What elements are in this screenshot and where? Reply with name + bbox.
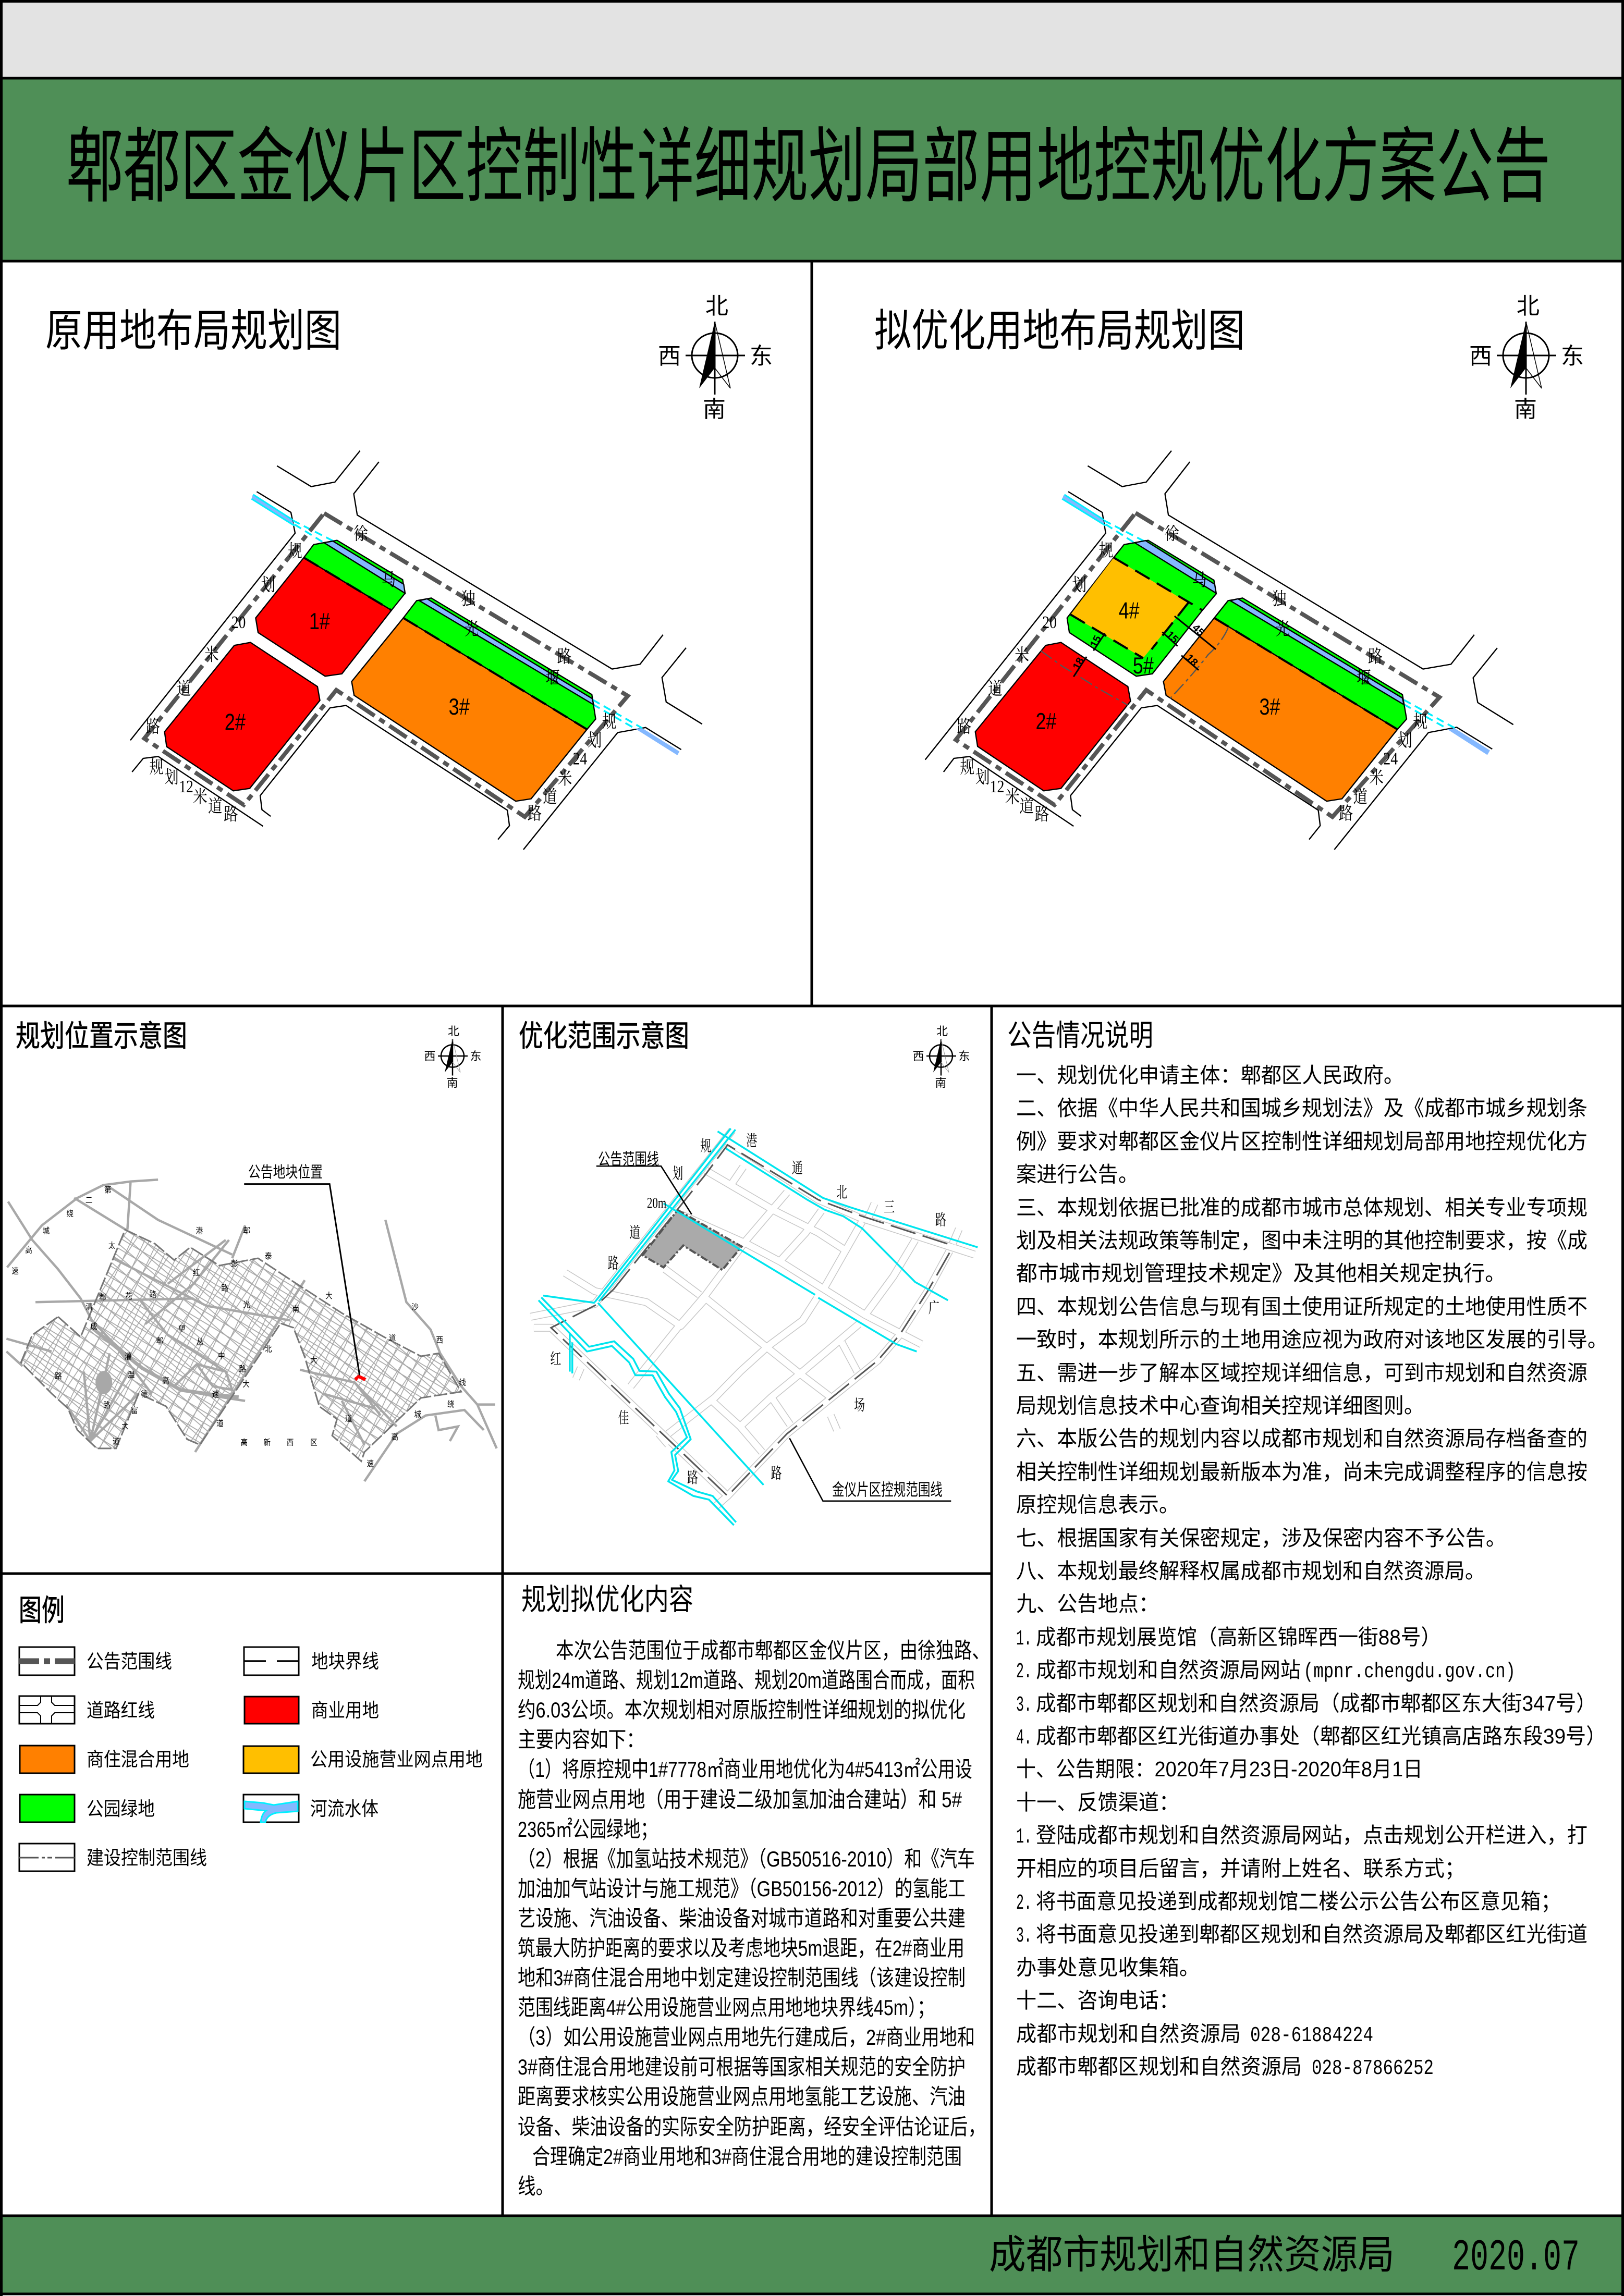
map road labels: 望	[178, 1324, 186, 1334]
road labels: 20	[1042, 612, 1057, 632]
text block: optimization content: （1）将原控规中1#7778㎡商业用地优化为4#5413㎡公用设	[518, 1757, 972, 1782]
map road labels: 路	[103, 1401, 111, 1410]
text block: notice description: 八、本规划最终解释权属成都市规划和自然资源局。	[1016, 1559, 1485, 1583]
map road labels: 郫	[156, 1336, 163, 1346]
scope road labels: 港	[746, 1132, 757, 1149]
plot dash boundaries	[1070, 558, 1397, 729]
dimension values: 45	[1190, 622, 1207, 639]
map road labels: 大	[121, 1421, 129, 1431]
text block: notice description: 十二、咨询电话：	[1016, 1988, 1179, 2012]
road labels	[957, 524, 1427, 824]
legend item: water: 河流水体	[310, 1798, 378, 1820]
icon: compass right: 北	[1517, 293, 1540, 319]
range boundary	[551, 1145, 953, 1496]
text block: notice description	[1016, 1063, 1608, 2081]
road labels: 划	[164, 768, 179, 787]
text block: notice description: 成都市规划展览馆（高新区锦晖西一街88号）	[1036, 1625, 1441, 1649]
text block: notice description: 九、公告地点：	[1016, 1592, 1159, 1616]
text block: notice description: 十、公告期限：2020年7月23日-2020年8月1日	[1016, 1757, 1423, 1781]
road labels: 路	[557, 647, 571, 667]
text block: notice description: 五、需进一步了解本区域控规详细信息，可到市规划和自然资源	[1016, 1361, 1588, 1385]
notice area	[643, 1210, 742, 1270]
map road labels: 温	[128, 1370, 135, 1380]
heading: scope: 优化范围示意图	[519, 1020, 689, 1053]
dimension values: 18	[1070, 656, 1086, 672]
text block: optimization content: 地和3#商住混合用地中划定建设控制范围线（该建设控制	[518, 1966, 966, 1990]
road labels	[146, 524, 616, 824]
road labels: 24	[573, 749, 587, 768]
legend item: plot boundary	[244, 1647, 379, 1675]
text block: notice description: 十一、反馈渠道：	[1016, 1790, 1179, 1814]
text block: notice description: 局规划信息技术中心查询相关控规详细图则。	[1016, 1394, 1424, 1418]
text block: optimization content: 范围线距离4#公用设施营业网点用地地块界线45m）；	[518, 1995, 935, 2020]
map road labels: 区	[310, 1439, 318, 1447]
legend item: utility: 公用设施营业网点用地	[310, 1749, 483, 1770]
text block: notice description: 原控规信息表示。	[1016, 1493, 1179, 1517]
block 2 commercial	[165, 643, 320, 791]
icon: compass left: 北	[705, 293, 728, 319]
icon: compass left: 西	[658, 343, 681, 369]
text block: notice description: 2.	[1016, 1660, 1032, 1684]
road labels: 划	[1072, 575, 1086, 595]
map road labels: 大	[310, 1356, 318, 1365]
text block: notice description: 1.	[1016, 1627, 1032, 1651]
plot dash boundaries	[304, 558, 587, 729]
scope road labels: 路	[771, 1465, 782, 1482]
map road labels: 道	[216, 1419, 224, 1428]
map road labels: 港	[196, 1226, 203, 1236]
map road labels: 西	[287, 1439, 294, 1447]
text block: notice description: 一、规划优化申请主体：郫都区人民政府。	[1016, 1063, 1404, 1087]
plot numbers: 2#	[1035, 708, 1057, 734]
panel: legend	[19, 1594, 483, 1871]
map road labels: 绕	[447, 1399, 455, 1409]
dimension values: 15	[1088, 633, 1104, 649]
road labels: 道	[177, 679, 191, 699]
map road labels: 郫	[243, 1226, 250, 1236]
text block: notice description: 七、根据国家有关保密规定，涉及保密内容不予公告。	[1016, 1526, 1506, 1550]
text block: notice description: 划及相关法规政策等制定，图中未注明的其他控制要求，按《成	[1016, 1229, 1588, 1253]
text block: optimization content: 加油加气站设计与施工规范》（GB50156-2012）的氢能工	[518, 1876, 966, 1901]
heading: location: 规划位置示意图	[16, 1020, 187, 1053]
map road labels: 沙	[411, 1303, 419, 1312]
road labels: 规	[1099, 541, 1113, 560]
block 3 water strip	[419, 599, 594, 705]
road labels: 道	[1019, 796, 1034, 816]
icon: compass scope: 东	[958, 1050, 970, 1063]
text block: notice description: 2.	[1016, 1892, 1032, 1916]
icon: compass location	[424, 1025, 482, 1089]
icon: compass scope: 西	[912, 1050, 924, 1063]
map road labels: 路	[221, 1284, 228, 1293]
text block: optimization content: 设备、柴油设备的实际安全防护距离，经安全评估论证后，	[518, 2115, 986, 2139]
district boundary	[21, 1230, 461, 1461]
map road labels: 高	[162, 1376, 169, 1385]
legend item: control line: 建设控制范围线	[87, 1847, 207, 1869]
legend item: notice boundary: 公告范围线	[87, 1651, 172, 1672]
legend item: mixed use	[20, 1746, 189, 1773]
road labels: 光	[465, 619, 479, 639]
plot numbers: 3#	[1259, 693, 1280, 720]
panel: original land use map	[45, 293, 773, 850]
scope road labels: 路	[687, 1469, 698, 1487]
map road labels: 二	[86, 1196, 93, 1205]
text block: notice description: 1.	[1016, 1825, 1032, 1849]
block 1 commercial	[255, 558, 392, 676]
notice boundary	[956, 513, 1439, 817]
plot numbers	[225, 608, 470, 735]
road labels: 独	[461, 590, 476, 609]
map: original land use	[130, 451, 702, 850]
road labels: 道	[988, 679, 1003, 699]
main roads	[6, 1180, 497, 1481]
map road labels: 路	[239, 1365, 246, 1374]
dimension values: 15	[1164, 629, 1181, 646]
road labels: 徐	[1165, 524, 1179, 544]
dimension values	[1070, 622, 1207, 672]
block 3 mixed use	[1164, 618, 1397, 801]
icon: compass left: 东	[750, 343, 773, 369]
block 1 water strip	[1135, 541, 1216, 593]
road labels: 规	[288, 542, 302, 561]
text block: notice description: 都市城市规划管理技术规定》及其他相关规定执行。	[1016, 1261, 1506, 1285]
map road labels: 红	[193, 1268, 200, 1278]
road labels: 路	[224, 805, 238, 824]
block 3 water strip	[1230, 599, 1404, 705]
road labels: 12	[179, 777, 193, 796]
map: scope	[531, 1128, 978, 1525]
map road labels: 西	[436, 1336, 443, 1345]
dense junction	[95, 1371, 112, 1394]
plot numbers: 2#	[225, 709, 246, 735]
map road labels: 新	[263, 1438, 271, 1447]
panel: optimization content	[518, 1583, 990, 2199]
scope road labels: 佳	[618, 1409, 629, 1427]
map road labels: 清	[86, 1302, 93, 1312]
plot numbers	[1035, 597, 1280, 734]
icon: compass scope: 北	[936, 1025, 948, 1038]
text block: optimization content: 主要内容如下：	[518, 1727, 644, 1752]
callout leaders	[596, 1166, 951, 1501]
top blank gray band	[0, 0, 1624, 79]
text block: notice description: 办事处意见收集箱。	[1016, 1956, 1200, 1980]
scope road labels: 红	[550, 1350, 561, 1368]
legend item: mixed use: 商住混合用地	[87, 1749, 189, 1770]
map road labels: 道	[113, 1437, 119, 1446]
notice boundary	[144, 513, 628, 817]
map road labels: 道	[389, 1333, 396, 1343]
icon: compass location: 北	[448, 1025, 459, 1038]
panel: location map	[6, 1021, 498, 1482]
notice plot marker	[354, 1374, 367, 1381]
map road labels: 光	[243, 1300, 250, 1309]
header band	[0, 78, 1624, 261]
map road labels: 北	[265, 1345, 272, 1354]
map road labels: 路	[55, 1371, 62, 1381]
text block: notice description: 一致时，本规划所示的土地用途应视为政府对该地区发展的引导。	[1016, 1328, 1608, 1352]
map road labels: 速	[212, 1390, 219, 1399]
road labels: 道	[208, 797, 222, 816]
legend item: notice boundary	[19, 1647, 172, 1675]
panel: optimization scope map	[519, 1020, 978, 1525]
text block: optimization content: 3#商住混合用地建设前可根据等国家相关规范的安全防护	[518, 2055, 966, 2079]
road labels: 规	[1413, 712, 1427, 732]
map road labels: 丛	[197, 1337, 203, 1347]
text block: notice description: 4.	[1016, 1726, 1032, 1750]
map: optimized land use	[925, 451, 1513, 850]
text block: optimization content: 约6.03公顷。本次规划相对原版控制性详细规划的拟优化	[518, 1698, 966, 1722]
river	[1062, 495, 1490, 755]
road interiors	[531, 1131, 974, 1507]
text block: optimization content: 本次公告范围位于成都市郫都区金仪片区，由徐独路、	[556, 1638, 990, 1663]
legend item: water	[243, 1795, 378, 1822]
scope road labels: 北	[836, 1184, 847, 1201]
road labels: 规	[149, 758, 164, 777]
map road labels: 高	[25, 1246, 32, 1255]
road red lines	[925, 451, 1513, 850]
footer issuer: 成都市规划和自然资源局	[989, 2233, 1395, 2277]
plot numbers: 4#	[1119, 597, 1140, 623]
map road labels: 高	[240, 1438, 248, 1447]
text block: notice description: 六、本版公告的规划内容以成都市规划和自然资源局存档备查的	[1016, 1427, 1588, 1451]
road labels: 规	[960, 757, 974, 777]
text block: notice description: 三、本规划依据已批准的成都市城市总体规划、相关专业专项规	[1016, 1196, 1588, 1220]
text block: optimization content: （2）根据《加氢站技术规范》（GB50516-2010）和《汽车	[518, 1847, 975, 1871]
text block: notice description: (mpnr.chengdu.gov.cn)	[1303, 1660, 1516, 1684]
icon: compass scope	[912, 1025, 970, 1089]
icon: compass right: 西	[1469, 343, 1492, 369]
text block: notice description: 例》要求对郫都区金仪片区控制性详细规划局部用地控规优化方	[1016, 1129, 1588, 1153]
icon: compass scope: 南	[935, 1076, 947, 1089]
street grid	[22, 1231, 459, 1458]
road labels: 米	[193, 788, 207, 807]
scope road labels: 划	[672, 1165, 683, 1182]
text block: notice description: 相关控制性详细规划最新版本为准，尚未完成调整程序的信息按	[1016, 1460, 1588, 1484]
road outlines	[531, 1131, 974, 1507]
map road labels: 城	[43, 1226, 50, 1236]
icon: compass location: 西	[424, 1050, 436, 1063]
map road labels: 成	[90, 1322, 97, 1331]
road labels: 路	[1368, 647, 1383, 667]
map road labels: 中	[218, 1351, 225, 1361]
road labels: 独	[1272, 589, 1287, 609]
road labels: 米	[558, 769, 572, 789]
map road labels: 花	[125, 1292, 132, 1301]
road labels: 路	[1034, 804, 1049, 824]
text block: notice description: 四、本规划公告信息与现有国土使用证所规定的土地使用性质不	[1016, 1295, 1588, 1319]
road labels: 划	[588, 731, 602, 751]
map road labels: 大	[325, 1291, 333, 1300]
road red lines	[130, 451, 702, 850]
construction control lines	[1041, 628, 1228, 705]
text block: optimization content: 线。	[518, 2174, 554, 2199]
map road labels: 绕	[66, 1209, 74, 1219]
road labels: 划	[975, 767, 990, 787]
road labels: 24	[1383, 748, 1398, 768]
callout: notice range: 公告范围线	[598, 1150, 659, 1169]
scope road labels: 20m	[647, 1194, 666, 1211]
panel: notice description	[1007, 1019, 1608, 2081]
map road labels: 大	[242, 1380, 250, 1389]
legend item: commercial	[245, 1697, 379, 1724]
plot numbers: 5#	[1133, 652, 1154, 679]
road labels: 米	[1015, 646, 1029, 666]
icon: compass right	[1469, 293, 1584, 422]
legend item: park	[20, 1795, 155, 1822]
river	[251, 495, 679, 755]
block 3 park strip	[404, 598, 596, 729]
text block: notice description: 3.	[1016, 1924, 1032, 1948]
map road labels: 速	[367, 1459, 374, 1468]
map road labels: 线	[459, 1378, 466, 1388]
road labels: 路	[146, 717, 160, 736]
heading: optimization content: 规划拟优化内容	[521, 1583, 693, 1616]
icon: compass left: 南	[703, 397, 726, 422]
plot numbers: 1#	[309, 608, 330, 634]
block 3 park strip	[1214, 598, 1407, 729]
scope road labels: 广	[929, 1299, 939, 1317]
road labels: 路	[1338, 804, 1353, 824]
block 1 park strip	[304, 541, 405, 610]
road labels: 米	[1005, 787, 1020, 807]
icon: compass location: 东	[470, 1050, 482, 1063]
text block: notice description: 成都市郫都区规划和自然资源局	[1016, 2055, 1302, 2079]
icon: compass location: 南	[446, 1076, 458, 1089]
road labels: 划	[1398, 730, 1412, 751]
text block: notice description: 3.	[1016, 1693, 1032, 1717]
map road labels: 南	[292, 1305, 299, 1314]
text block: notice description: 开相应的项目后留言，并请附上姓名、联系方式；	[1016, 1857, 1465, 1881]
text block: notice description: 成都市规划和自然资源局网站	[1036, 1658, 1301, 1682]
legend item: utility	[243, 1746, 483, 1773]
panel: optimized land use map	[874, 293, 1584, 850]
legend item: road red line: 道路红线	[87, 1700, 155, 1721]
plot numbers: 3#	[449, 694, 470, 720]
text block: optimization content: 2365㎡公园绿地；	[518, 1817, 657, 1841]
map road labels: 泰	[265, 1251, 272, 1261]
scope road labels: 路	[608, 1255, 619, 1272]
map road labels: 道	[345, 1414, 352, 1423]
map road labels: 城	[414, 1410, 421, 1419]
scope road labels: 路	[935, 1211, 946, 1229]
road labels: 米	[204, 645, 219, 665]
text block: optimization content: （3）如公用设施营业网点用地先行建成后，2#商业用地和	[518, 2025, 975, 2049]
road labels: 堰	[545, 668, 560, 688]
text block: optimization content: 距离要求核实公用设施营业网点用地氢能工艺设施、汽油	[518, 2084, 966, 2109]
legend item: commercial: 商业用地	[311, 1700, 379, 1721]
text block: optimization content: 合理确定2#商业用地和3#商住混合用地的建设控制范围	[532, 2144, 962, 2169]
cyan water lines	[539, 1128, 978, 1525]
text block: optimization content	[518, 1638, 990, 2199]
legend item: control line	[19, 1844, 207, 1871]
text block: notice description: 案进行公告。	[1016, 1162, 1139, 1186]
block 2 commercial	[975, 643, 1131, 791]
text block: optimization content: 艺设施、汽油设备、柴油设备对城市道路和对重要公共建	[518, 1906, 966, 1931]
block 5 park	[1067, 541, 1216, 676]
road labels: 米	[1369, 768, 1384, 788]
text block: optimization content: 规划24m道路、规划12m道路、规划20m道路围合而成，面积	[518, 1668, 975, 1692]
map road labels: 路	[149, 1290, 156, 1299]
map road labels: 第	[104, 1185, 111, 1195]
scope road labels	[550, 1132, 946, 1487]
text block: notice description: 成都市规划和自然资源局	[1016, 2022, 1241, 2046]
map road labels: 富	[131, 1405, 138, 1415]
text block: optimization content: 施营业网点用地（用于建设二级加氢加油合建站）和 5#	[518, 1787, 962, 1812]
heading: notice description: 公告情况说明	[1007, 1019, 1153, 1052]
road labels: 马	[382, 570, 396, 590]
legend item: road red line	[19, 1696, 155, 1724]
road labels: 20	[231, 612, 246, 632]
callout: notice plot location: 公告地块位置	[248, 1164, 323, 1181]
map road labels: 灌	[125, 1352, 131, 1361]
legend item: plot boundary: 地块界线	[311, 1651, 379, 1672]
road labels: 光	[1275, 619, 1290, 639]
text block: optimization content: 筑最大防护距离的要求以及考虑地块5m退距，在2#商业用	[518, 1936, 964, 1960]
text block: notice description: 二、依据《中华人民共和国城乡规划法》及《成都市城乡规划条	[1016, 1096, 1588, 1120]
map road labels: 速	[11, 1267, 19, 1276]
map road labels: 太	[108, 1241, 116, 1250]
heading: optimized layout: 拟优化用地布局规划图	[874, 306, 1245, 356]
text block: notice description: 登陆成都市规划和自然资源局网站，点击规划公开栏进入，打	[1036, 1823, 1588, 1847]
road labels: 马	[1192, 570, 1206, 590]
expressway band	[92, 1328, 239, 1397]
text block: notice description: 028-87866252	[1312, 2057, 1434, 2081]
scope road labels: 三	[884, 1198, 895, 1216]
text block: notice description: 028-61884224	[1250, 2024, 1373, 2048]
map road labels: 德	[141, 1390, 148, 1399]
text block: notice description: 将书面意见投递到成都规划馆二楼公示公告公布区意见箱；	[1036, 1889, 1561, 1913]
icon: compass right: 南	[1514, 397, 1537, 422]
icon: compass right: 东	[1561, 343, 1584, 369]
dimension values: 18	[1183, 652, 1200, 669]
road labels: 规	[602, 712, 616, 732]
callout: control range: 金仪片区控规范围线	[832, 1480, 943, 1499]
text block: notice description: 将书面意见投递到郫都区规划和自然资源局及郫都区红光街道	[1036, 1922, 1588, 1946]
heading: legend: 图例	[19, 1594, 65, 1627]
block 3 mixed use	[352, 618, 587, 801]
road labels: 12	[990, 777, 1004, 796]
heading: original layout: 原用地布局规划图	[45, 306, 341, 356]
dimension lines	[1073, 616, 1216, 677]
icon: compass left	[658, 293, 773, 422]
road labels: 路	[528, 804, 542, 824]
legend item: park: 公园绿地	[87, 1798, 155, 1820]
scope road labels: 道	[629, 1224, 640, 1242]
map road labels: 彭	[231, 1259, 238, 1268]
block 4 utility	[1070, 558, 1188, 658]
block 1 water strip	[324, 541, 405, 593]
map: city road network	[6, 1178, 498, 1482]
scope road labels: 通	[792, 1159, 803, 1177]
road labels: 路	[957, 717, 971, 736]
leader line	[244, 1184, 360, 1376]
footer band	[0, 2216, 1624, 2293]
road labels: 道	[1353, 787, 1367, 807]
text block: notice description: 成都市郫都区规划和自然资源局（成都市郫都区东大街347号）	[1036, 1691, 1596, 1715]
map road labels	[11, 1185, 466, 1468]
road labels: 堰	[1357, 668, 1371, 688]
map road labels: 高	[391, 1432, 398, 1442]
road labels: 道	[543, 788, 557, 807]
road labels: 划	[261, 575, 275, 595]
scope road labels: 场	[854, 1397, 865, 1414]
road labels: 徐	[353, 524, 368, 544]
map road labels: 郫	[99, 1293, 106, 1302]
scope road labels: 规	[700, 1137, 711, 1155]
text block: notice description: 成都市郫都区红光街道办事处（郫都区红光镇高店路东段39号）	[1036, 1724, 1606, 1748]
